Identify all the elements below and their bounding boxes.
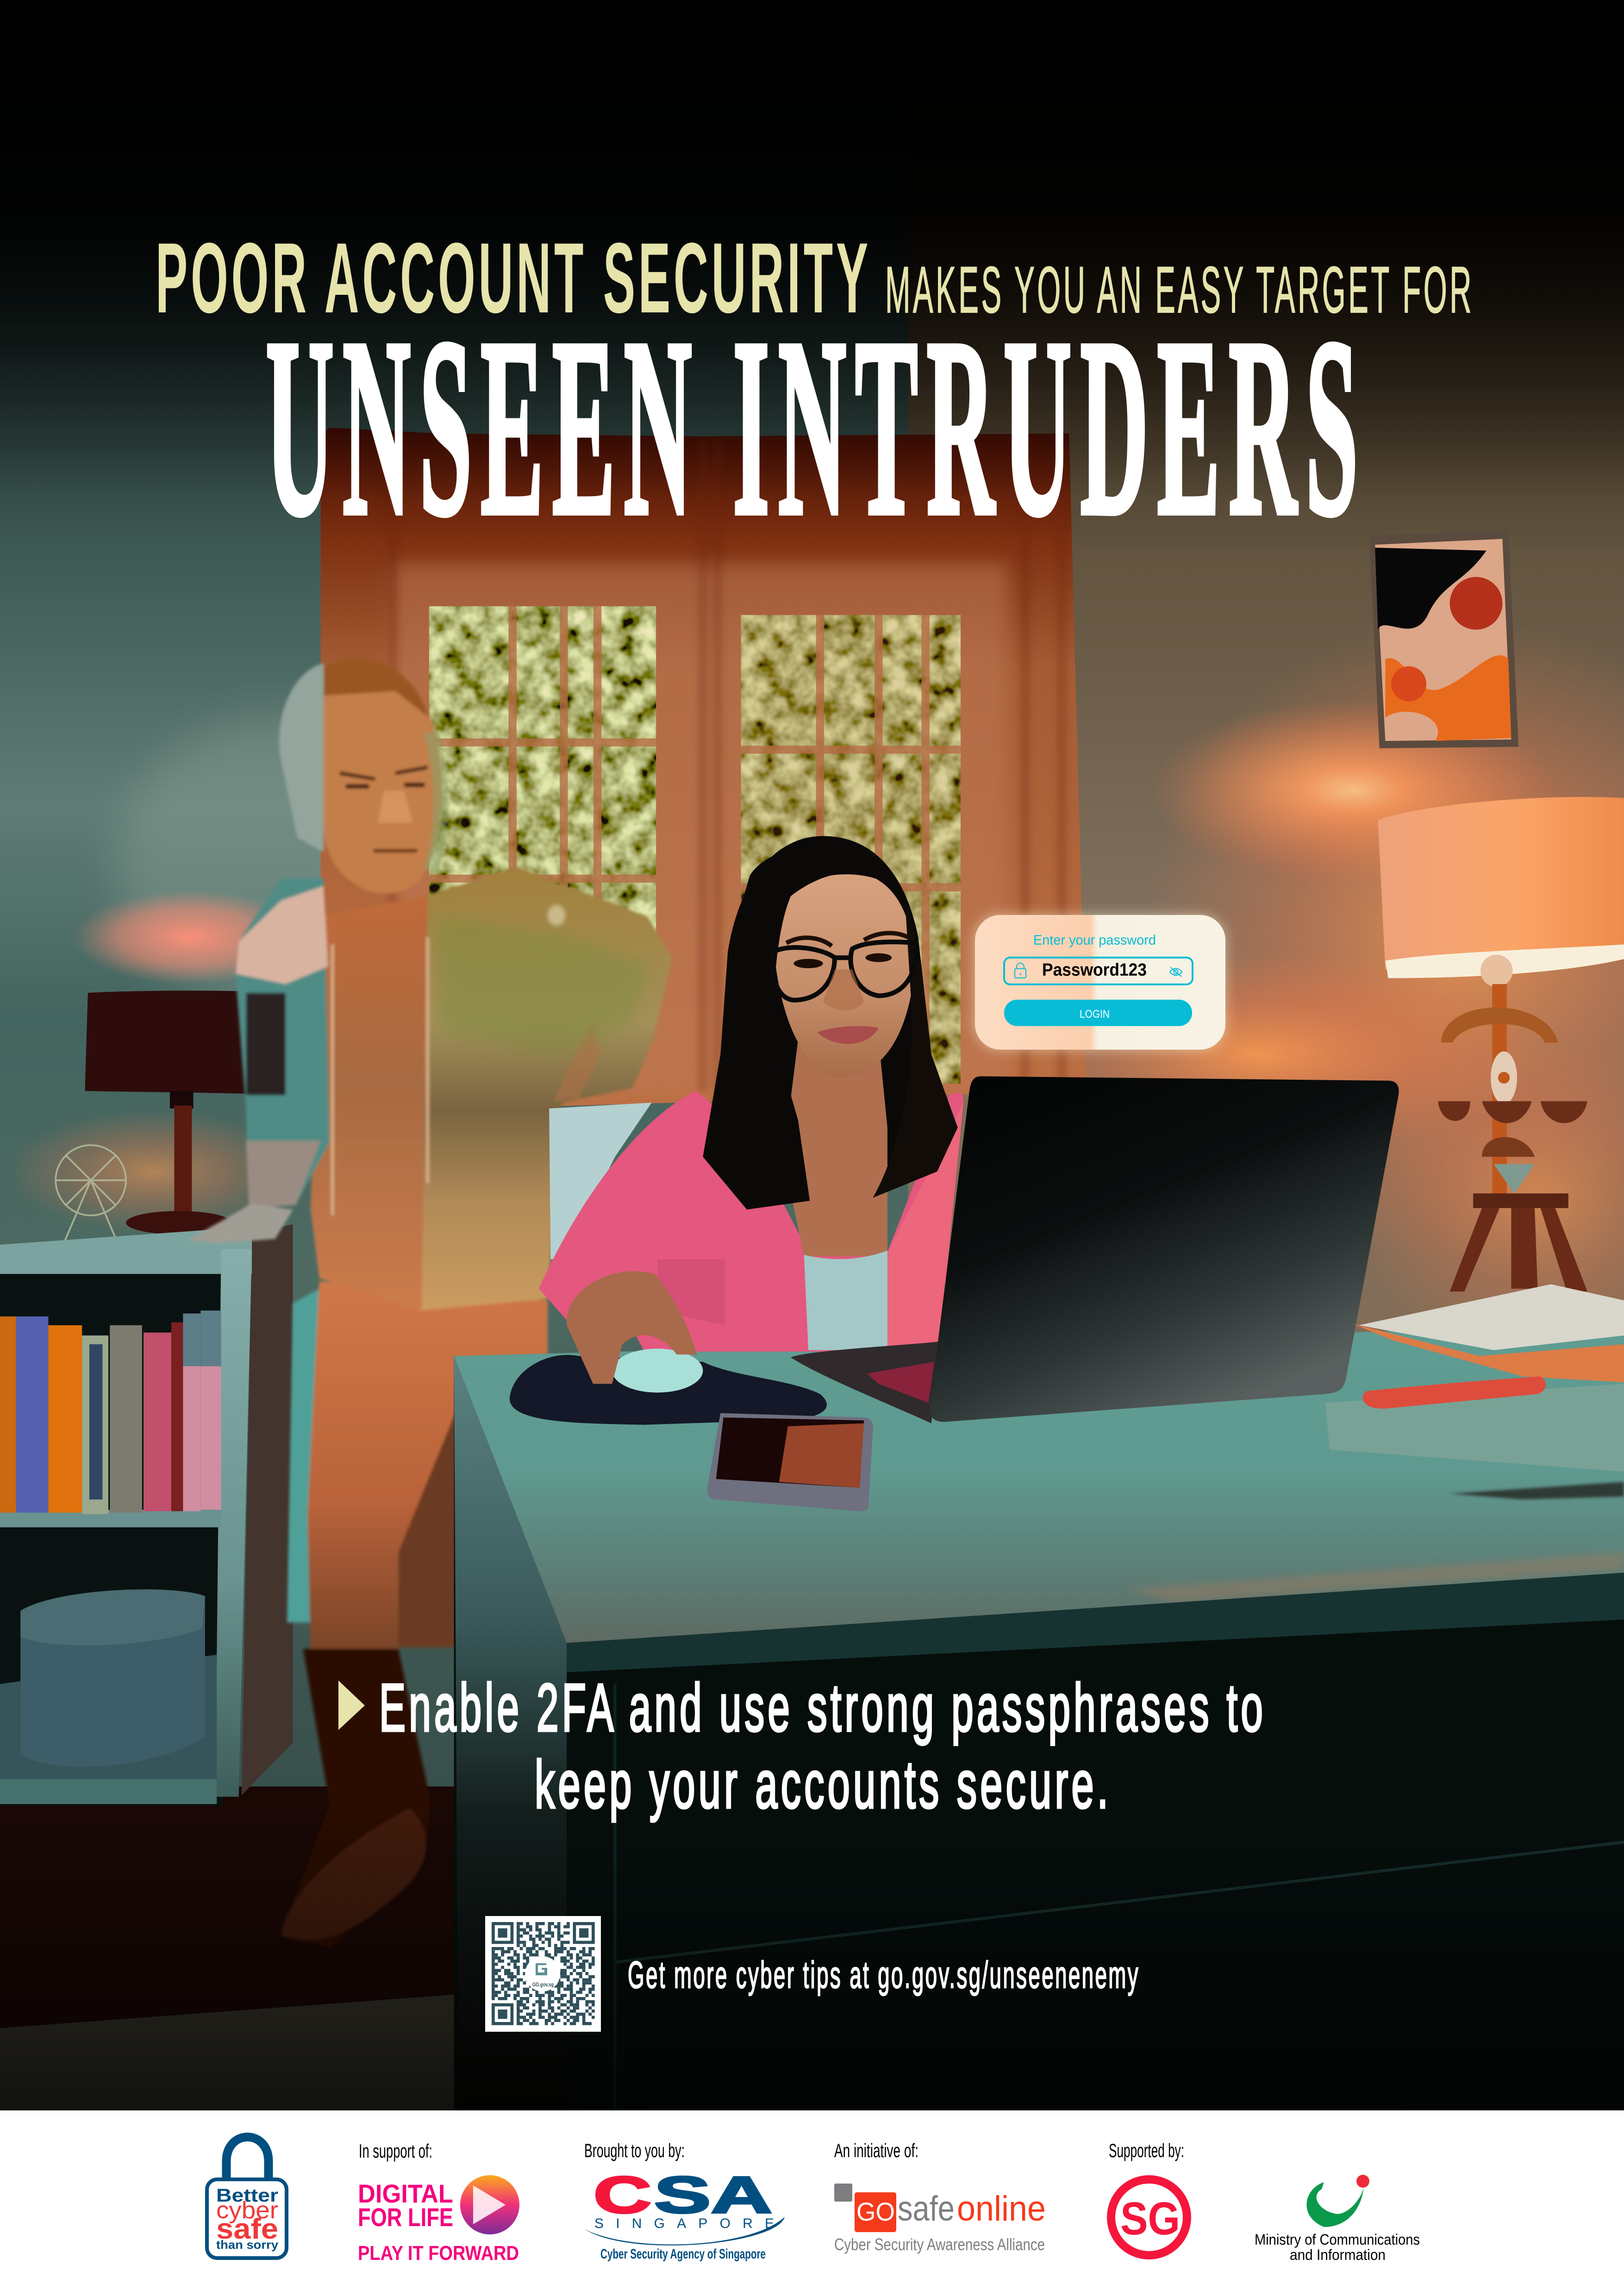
label: in support of: In support of: <box>359 2140 432 2162</box>
call to action <box>338 1670 1266 1822</box>
hoodie drawstrings <box>332 937 428 1215</box>
logo: CSA Singapore: C <box>593 2166 651 2224</box>
logo: go safe online: safe <box>898 2189 955 2228</box>
logo: SG circle <box>1111 2179 1187 2255</box>
ghost intruder <box>187 659 672 1948</box>
password field <box>1004 958 1193 984</box>
ministry name: Ministry of Communications <box>1255 2231 1420 2248</box>
ferris wheel ornament <box>56 1145 126 1244</box>
teal strip behind leg <box>287 1288 319 1623</box>
glasses <box>773 942 916 1000</box>
logo: better cyber safe than sorry: cyber <box>216 2197 278 2224</box>
hair back <box>720 836 944 1171</box>
logo: SG circle: SG <box>1120 2193 1180 2245</box>
play arrow <box>338 1680 365 1730</box>
label: an initiative of: An initiative of: <box>834 2140 918 2161</box>
mouse <box>612 1349 703 1393</box>
eyebrows <box>787 933 908 946</box>
call to action line 2: keep your accounts secure. <box>535 1747 1112 1822</box>
red pen <box>1363 1376 1546 1409</box>
ghost shoulder lit peach <box>236 886 328 984</box>
ministry name: and Information <box>1290 2246 1386 2263</box>
papers and folders <box>1353 1284 1624 1382</box>
label: brought to you by: Brought to you by: <box>584 2140 685 2161</box>
login button: LOGIN <box>1080 1008 1110 1020</box>
nose and lips <box>823 970 864 1010</box>
logo: digital for life: FOR LIFE <box>358 2203 453 2232</box>
QR code <box>485 1916 601 2032</box>
logo: digital for life <box>358 2175 519 2265</box>
QR logo: GO.gov.sg <box>532 1981 554 1988</box>
logo: better cyber safe than sorry: than sorry <box>216 2238 279 2252</box>
password field: Password123 <box>1042 960 1147 980</box>
eyes <box>793 953 892 968</box>
window panes with foliage <box>429 606 961 1083</box>
ghost hoodie right half <box>418 867 672 1311</box>
top <box>804 1251 887 1350</box>
phone <box>707 1413 873 1511</box>
ghost hoodie teal sleeve <box>236 878 330 1208</box>
lock icon <box>1015 963 1026 978</box>
ghost legs <box>281 1281 548 1948</box>
bottom darkness <box>0 1801 1624 2116</box>
desk tray shadow <box>1450 1482 1624 1500</box>
hair left lock <box>703 845 896 1209</box>
face <box>772 874 914 1078</box>
ghost cuff grey <box>246 1141 321 1208</box>
books <box>0 1311 221 1514</box>
hair right lock <box>873 901 958 1198</box>
stool <box>1450 1194 1587 1292</box>
logo: CSA Singapore: SA <box>654 2166 772 2224</box>
logo: better cyber safe than sorry: Better <box>216 2185 278 2206</box>
laptop <box>791 1076 1399 1423</box>
logo: go safe online: online <box>957 2189 1046 2228</box>
wall art <box>1369 530 1518 748</box>
hand <box>567 1271 697 1384</box>
logo: ministry swirl <box>1306 2175 1369 2227</box>
mouse pad <box>510 1355 827 1425</box>
logo: better cyber safe than sorry: safe <box>216 2213 278 2245</box>
logo: CSA Singapore: Cyber Security Agency of Singapore <box>600 2246 766 2262</box>
woman <box>539 836 963 1351</box>
bookshelf <box>0 1224 293 1805</box>
login button <box>1004 1000 1192 1026</box>
logo: CSA Singapore <box>584 2166 785 2262</box>
logo: better cyber safe than sorry <box>207 2137 287 2258</box>
top darkness <box>0 0 1624 498</box>
left lamp <box>85 990 286 1234</box>
logo: digital for life: PLAY IT FORWARD <box>358 2242 519 2265</box>
floor and carpet <box>0 1728 1415 2116</box>
lamp shade <box>1378 797 1624 970</box>
logo: CSA Singapore: SINGAPORE <box>594 2216 774 2231</box>
desk <box>454 1325 1624 2110</box>
ghost arm inner gap <box>554 1022 600 1101</box>
chair back <box>549 1102 652 1259</box>
logo: digital for life: DIGITAL <box>358 2179 453 2208</box>
lamp shade seen through ghost <box>246 993 286 1095</box>
storage box <box>20 1589 205 1767</box>
seen-through curtain behind leg <box>398 1406 457 1648</box>
jacket <box>539 1091 963 1351</box>
ghost head <box>279 659 442 894</box>
password prompt: Enter your password <box>1033 933 1156 948</box>
ministry name <box>1255 2231 1420 2263</box>
acrylic tray <box>1325 1384 1624 1472</box>
logo: go safe online: Cyber Security Awareness Alliance <box>834 2235 1045 2254</box>
headline line 1: POOR ACCOUNT SECURITY <box>156 222 871 334</box>
more tips line: Get more cyber tips at go.gov.sg/unseenenemy <box>628 1954 1140 1996</box>
login card <box>975 915 1225 1050</box>
ghost hand on shelf <box>187 1204 293 1243</box>
hidden-password eye icon <box>1170 967 1182 977</box>
QR logo <box>525 1956 560 1991</box>
logo: go safe online: GO <box>856 2197 895 2226</box>
footer logo band <box>0 2110 1624 2296</box>
lamp ornaments <box>1438 955 1587 1196</box>
logo: go safe online <box>834 2184 1046 2254</box>
label: supported by: Supported by: <box>1109 2140 1184 2161</box>
window curtain <box>321 428 1087 1113</box>
wall glows from lamps <box>7 615 1624 1362</box>
foliage showing through ghost <box>437 905 652 1054</box>
neck and chest <box>783 1039 887 1257</box>
ghost hoodie centre <box>311 896 428 1311</box>
right table lamp <box>1378 797 1624 1292</box>
